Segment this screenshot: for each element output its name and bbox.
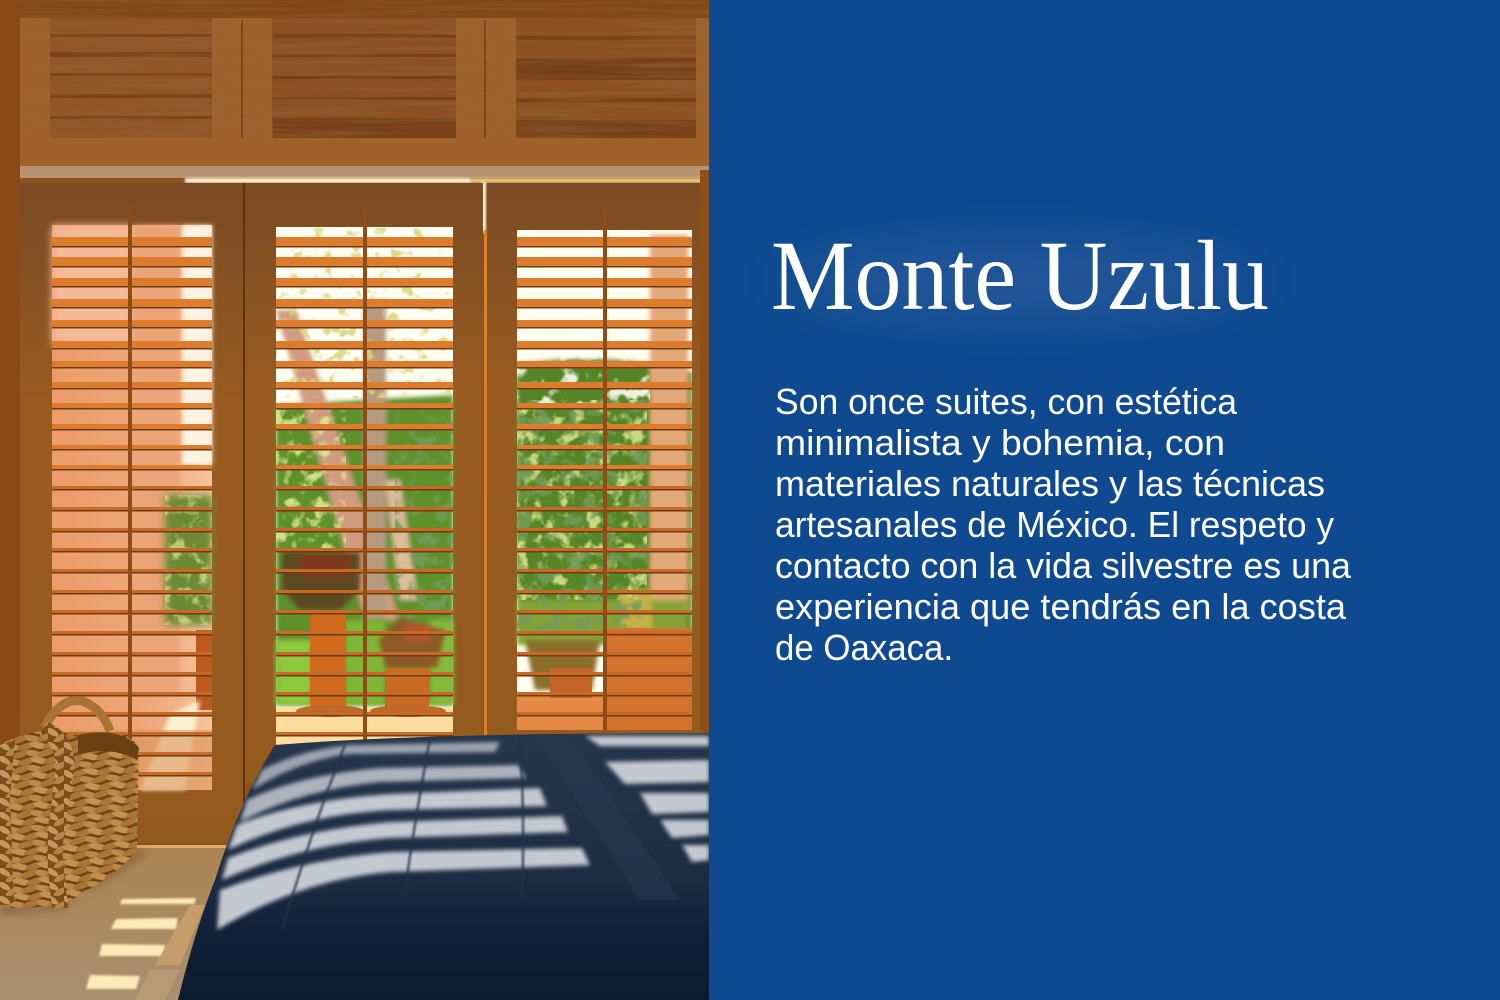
- icon: woven basket: [0, 701, 139, 908]
- bed seam lines: [282, 738, 523, 930]
- window scene: left shutter: [52, 225, 212, 790]
- floor: [0, 845, 230, 1000]
- basket floor shadow: [0, 850, 150, 915]
- wood wall backdrop: [20, 178, 700, 1000]
- wood grain overlay: [20, 0, 709, 138]
- title: Monte Uzulu: [771, 220, 1269, 331]
- floor light patches: [86, 898, 196, 989]
- middle foliage: [276, 300, 453, 705]
- text block: description: de Oaxaca.: [775, 627, 953, 668]
- bed with striped shadow: [178, 733, 709, 1000]
- title glow: [790, 242, 1250, 318]
- bed side step: [155, 905, 205, 965]
- text block: description: materiales naturales y las técnicas: [775, 463, 1325, 504]
- text block: description: artesanales de México. El respeto y: [775, 504, 1334, 545]
- left wall post: [0, 16, 20, 178]
- text block: description: contacto con la vida silvestre es una: [775, 545, 1352, 586]
- text block: description: Son once suites, con estética: [775, 381, 1238, 422]
- bed light stripes: [217, 736, 709, 930]
- light strip above shutters: [185, 178, 709, 233]
- shutter frames: [20, 170, 709, 843]
- text block: description: experiencia que tendrás en la costa: [775, 586, 1347, 627]
- text block: description: [775, 381, 1352, 668]
- window scene: right shutter: [517, 230, 692, 730]
- blanket fold band: [613, 852, 678, 899]
- window scene: middle shutter: [276, 227, 453, 747]
- upper fixed louvres: [0, 0, 709, 142]
- shutter tilt rods: [128, 205, 607, 790]
- text block: description: minimalista y bohemia, con: [775, 422, 1225, 463]
- shutter slats: [0, 237, 709, 776]
- horizontal beam: [20, 138, 709, 168]
- panel: photo of shuttered suite: [0, 0, 709, 1000]
